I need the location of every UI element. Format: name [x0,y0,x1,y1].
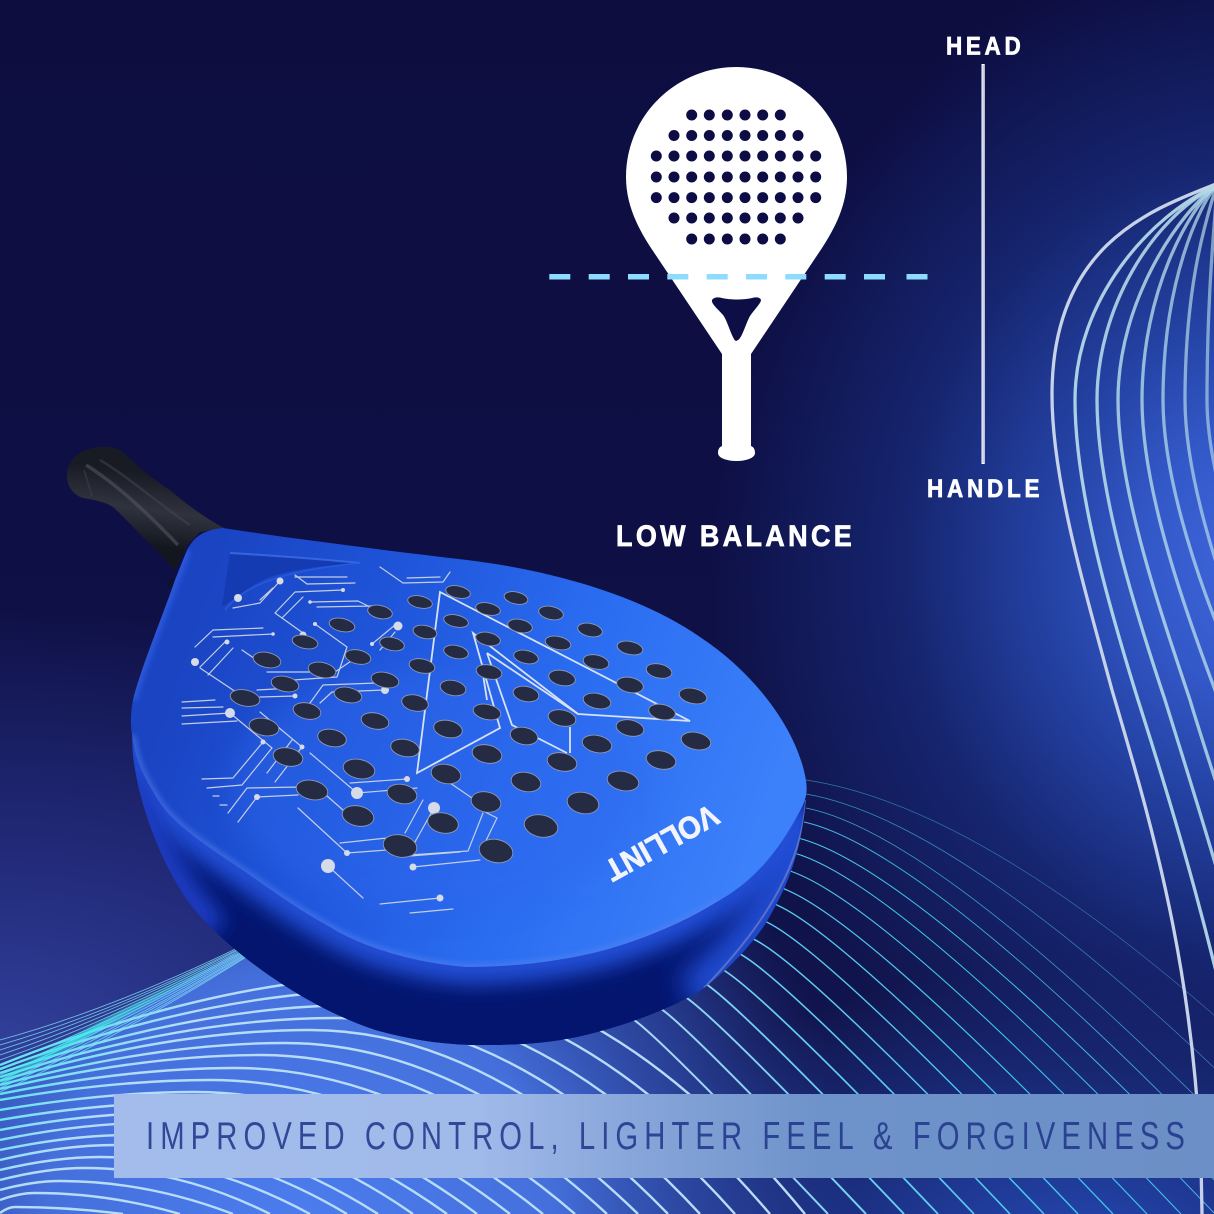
circuit nodes [191,578,444,902]
racket holes pattern [651,110,821,244]
balance point dashed line [549,274,928,280]
caption banner [114,1094,1214,1178]
wave lines: cyan convergence band [0,936,262,1092]
label: head: HEAD [946,32,1021,61]
lower wave background glow [0,880,1214,1214]
racket side wall [132,736,806,1046]
throat opening [222,553,360,610]
caption text: IMPROVED CONTROL, LIGHTER FEEL & FORGIVENESS [146,1115,1185,1158]
label: handle: HANDLE [927,475,1040,503]
circuit traces [182,567,497,913]
face highlights [132,550,720,967]
wave lines: left band and lower arcs [0,975,805,1214]
wave lines: arcs right of the racket [631,780,1214,1214]
grip handle [67,447,224,588]
head to handle scale line [982,64,985,464]
racket holes [229,584,712,866]
white racket diagram [626,67,847,461]
racket face [131,528,807,967]
arrowhead logo lines [417,592,690,773]
racket throat hole [712,297,761,341]
racket brand logo: VOLLINT [599,797,724,888]
racket silhouette [626,67,847,461]
racket photo [67,447,807,1045]
wave lines: large curves at right [1052,184,1214,1214]
label: low balance: LOW BALANCE [616,520,852,553]
